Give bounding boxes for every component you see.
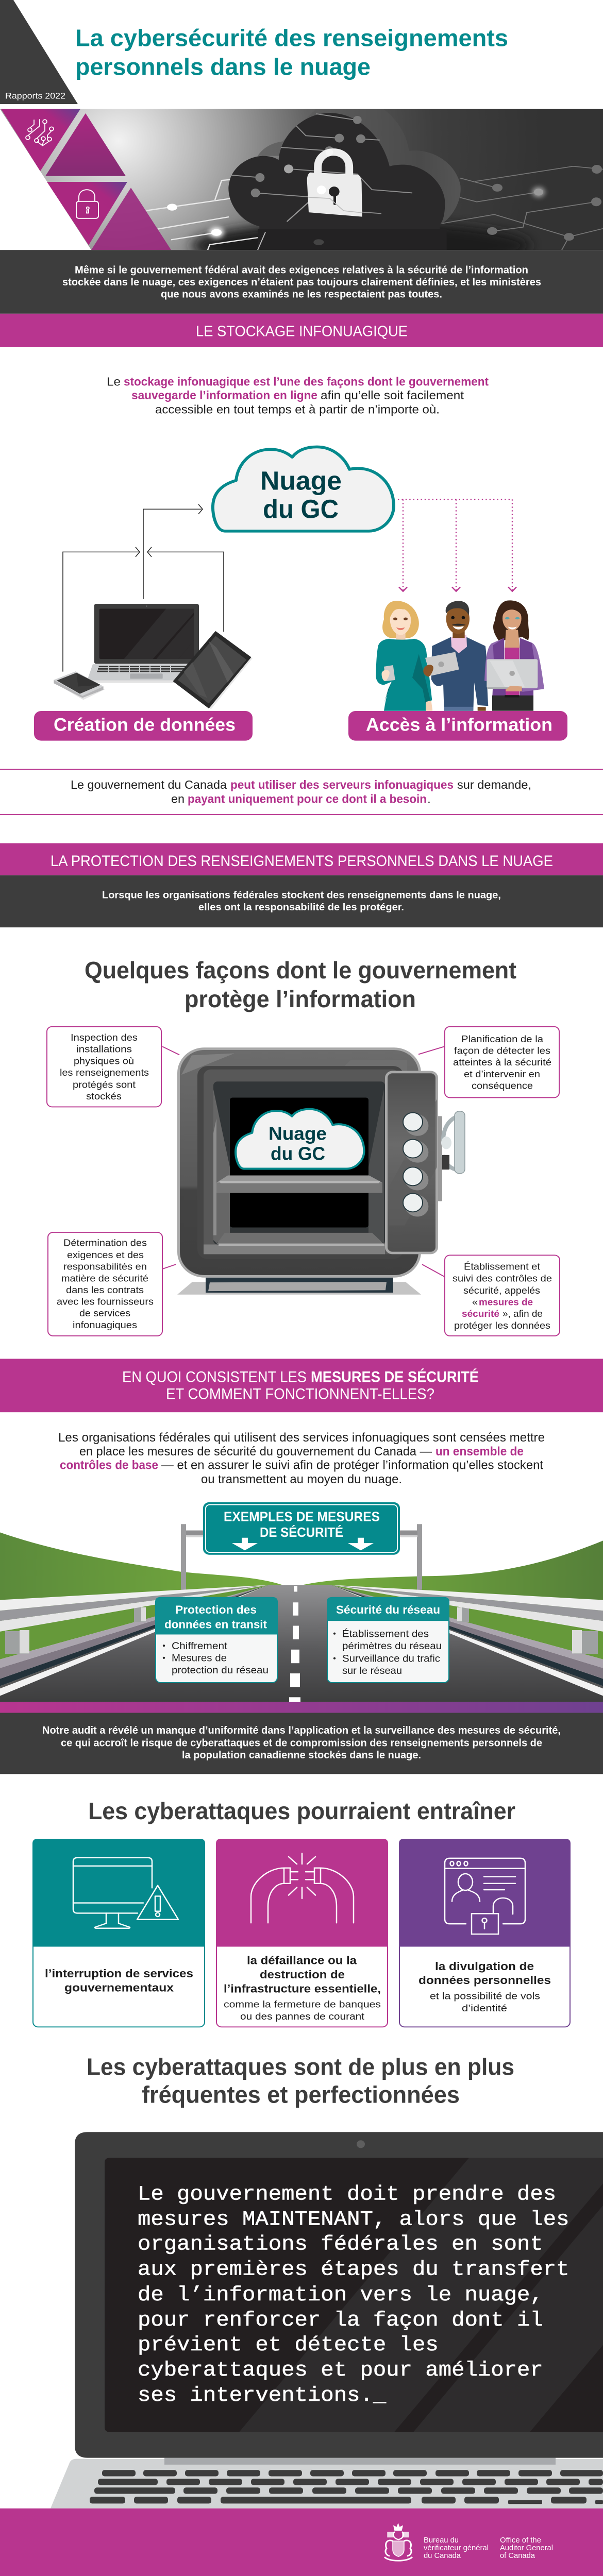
- cloud storage definition: sauvegarde l’information en ligne: [131, 389, 317, 402]
- hero image: padlocked cloud on circuit board: [0, 109, 603, 250]
- intro band: [0, 250, 603, 314]
- GC cloud: [213, 447, 394, 531]
- callout: breach response planning: Planification de la: [461, 1033, 543, 1045]
- card: personal data disclosure: [399, 1839, 571, 2027]
- illustration: three people with devices: [376, 600, 544, 711]
- intro band: Même si le gouvernement fédéral avait des exigences relatives à la sécurité de l’information: [75, 264, 528, 276]
- panel: data in transit protection: Chiffrement: [172, 1640, 227, 1652]
- callout: contract requirements: de services: [79, 1308, 130, 1319]
- call to action on laptop screen: aux premières étapes du transfert: [138, 2259, 569, 2281]
- highway sign: examples of security measures: EXEMPLES DE MESURES: [224, 1509, 380, 1524]
- report label: Rapports 2022: [5, 91, 65, 101]
- footer: Bureau du: [424, 2536, 459, 2545]
- keyboard: [90, 2470, 603, 2504]
- callout: security controls: suivi des contrôles de: [453, 1273, 552, 1284]
- callout: security controls: mesures de: [479, 1297, 533, 1308]
- callout: contract requirements: exigences et des: [67, 1249, 144, 1261]
- panel: data in transit protection: protection du réseau: [172, 1665, 269, 1676]
- audit finding band: Notre audit a révélé un manque d’uniformité dans l’application et la surveillance des mesures de sécurité,: [42, 1724, 561, 1736]
- icon: laptop, tablet and phone: [54, 604, 253, 709]
- label: access to information: [348, 711, 567, 741]
- icon: user profile with lock: [445, 1858, 525, 1934]
- callout: breach response planning: atteintes à la sécurité: [453, 1057, 551, 1068]
- callout: site inspection: Inspection des: [71, 1032, 138, 1043]
- decorative triangle: [45, 113, 126, 176]
- section band: what are security measures: ET COMMENT FONCTIONNENT-ELLES?: [166, 1386, 434, 1402]
- GC cloud: du GC: [263, 495, 339, 524]
- label: access to information: Accès à l’information: [366, 715, 552, 735]
- decorative triangle with lock icon: [47, 182, 127, 245]
- woman with phone: [376, 601, 432, 711]
- callout: contract requirements: infonuagiques: [73, 1319, 137, 1331]
- callout: on-demand cloud servers: en: [171, 792, 185, 806]
- icon: unplugged cables: [251, 1853, 354, 1923]
- panel: network security: Surveillance du trafic: [342, 1653, 440, 1664]
- card: infrastructure failure: [216, 1839, 388, 2027]
- audit finding band: ce qui accroît le risque de cyberattaques et de compromission des renseignements personnels de: [61, 1737, 542, 1749]
- cloud storage definition: stockage infonuagique est l’une des façons dont le gouvernement: [124, 375, 489, 388]
- text: security controls explanation: [58, 1431, 545, 1486]
- card: service interruption: gouvernementaux: [64, 1981, 174, 1994]
- callout: on-demand cloud servers: [0, 769, 603, 815]
- footer: vérificateur général: [424, 2544, 489, 2552]
- illustration: large laptop: [51, 2132, 603, 2509]
- panel: network security: sur le réseau: [342, 1666, 402, 1676]
- small GC cloud: [236, 1109, 364, 1169]
- logo: coat of arms: [384, 2524, 412, 2561]
- callout: contract requirements: matière de sécurité: [61, 1273, 148, 1284]
- section band: what are security measures: MESURES DE SÉCURITÉ: [311, 1368, 479, 1385]
- man with tablet: [423, 601, 488, 711]
- connector lines from callouts to safe: [162, 1046, 444, 1277]
- call to action on laptop screen: organisations fédérales en sont: [138, 2233, 543, 2256]
- card: infrastructure failure: la défaillance ou la: [247, 1954, 357, 1967]
- safe door with knobs and handle: [387, 1072, 465, 1253]
- panel: network security: périmètres du réseau: [342, 1640, 442, 1652]
- responsibility band: elles ont la responsabilité de les protéger.: [198, 902, 404, 913]
- label: data creation: Création de données: [54, 715, 236, 735]
- responsibility band: [0, 875, 603, 927]
- panel: network security: Établissement des: [342, 1628, 429, 1639]
- heading: attacks more frequent and sophisticated: fréquentes et perfectionnées: [142, 2082, 460, 2108]
- call to action on laptop screen: Le gouvernement doit prendre des: [138, 2183, 556, 2206]
- audit finding band: la population canadienne stockés dans le nuage.: [182, 1749, 421, 1761]
- heading: ways the government protects information: [85, 957, 516, 1013]
- callout: contract requirements: avec les fournisseurs: [57, 1296, 154, 1307]
- GC cloud: Nuage: [260, 466, 342, 496]
- cloud storage definition: accessible en tout temps et à partir de n’importe où.: [155, 403, 440, 416]
- card: personal data disclosure: d’identité: [462, 2003, 507, 2014]
- callout: breach response planning: [445, 1027, 559, 1097]
- callout: contract requirements: Détermination des: [63, 1238, 147, 1248]
- text: security controls explanation: ou transmettent au moyen du nuage.: [201, 1473, 402, 1486]
- call to action on laptop screen: [138, 2183, 569, 2408]
- cloud storage definition: Le: [107, 375, 121, 388]
- woman with laptop: [484, 600, 544, 711]
- card: service interruption: l’interruption de services: [45, 1967, 193, 1980]
- heading: ways the government protects information: protège l’information: [185, 986, 416, 1013]
- call to action on laptop screen: ses interventions._: [138, 2384, 387, 2408]
- card: infrastructure failure: destruction de: [260, 1968, 345, 1981]
- section band: protecting personal information: LA PROTECTION DES RENSEIGNEMENTS PERSONNELS DANS LE NUAGE: [51, 853, 553, 870]
- illustration: highway: [0, 1524, 603, 1702]
- illustration: safe holding the GC cloud: Nuage: [269, 1124, 327, 1144]
- section band: cloud storage: LE STOCKAGE INFONUAGIQUE: [196, 324, 408, 340]
- header corner triangle: [0, 0, 78, 104]
- footer: Office of the: [500, 2536, 541, 2545]
- footer: du Canada: [424, 2551, 461, 2560]
- callout: site inspection: physiques où: [74, 1056, 134, 1066]
- cloud storage definition: [107, 375, 489, 416]
- responsibility band: Lorsque les organisations fédérales stockent des renseignements dans le nuage,: [102, 890, 501, 901]
- footer: of Canada: [500, 2551, 535, 2560]
- illustration: safe holding the GC cloud: [177, 1049, 465, 1295]
- footer: [0, 2509, 603, 2576]
- text: security controls explanation: en place les mesures de sécurité du gouvernement du Canada —: [79, 1445, 432, 1459]
- panel: data in transit protection: données en transit: [164, 1618, 267, 1631]
- label: data creation: [34, 711, 253, 741]
- callout: security controls: [445, 1255, 560, 1336]
- title: [75, 25, 508, 80]
- card: personal data disclosure: la divulgation de: [435, 1959, 534, 1973]
- decorative triangle with circuit icon: [1, 109, 80, 171]
- padlock: [307, 149, 362, 217]
- title: La cybersécurité des renseignements: [75, 25, 508, 52]
- card: infrastructure failure: l’infrastructure essentielle,: [224, 1982, 381, 1995]
- callout: contract requirements: dans les contrats: [66, 1284, 144, 1296]
- callout: site inspection: les renseignements: [60, 1067, 149, 1078]
- card: personal data disclosure: et la possibilité de vols: [430, 1991, 540, 2002]
- callout: site inspection: [47, 1027, 161, 1107]
- intro band: stockée dans le nuage, ces exigences n’étaient pas toujours clairement définies, et les ministères: [62, 276, 541, 288]
- callout: breach response planning: et d’intervenir en: [464, 1069, 540, 1080]
- heading: cyberattacks could cause: Les cyberattaques pourraient entraîner: [88, 1798, 515, 1825]
- callout: on-demand cloud servers: peut utiliser des serveurs infonuagiques: [230, 778, 454, 792]
- callout: security controls: Établissement et: [464, 1261, 541, 1272]
- panel: data in transit protection: Protection des: [175, 1603, 257, 1616]
- callout: site inspection: installations: [76, 1044, 132, 1055]
- arrows: devices to cloud: [63, 504, 224, 672]
- call to action on laptop screen: de l’information vers le nuage,: [138, 2284, 543, 2307]
- panel: data in transit protection: [155, 1597, 278, 1683]
- callout: on-demand cloud servers: .: [427, 792, 431, 806]
- callout: breach response planning: conséquence: [472, 1080, 533, 1091]
- icon: monitor with warning: [73, 1858, 178, 1928]
- section band: protecting personal information: [0, 843, 603, 875]
- illustration: safe holding the GC cloud: du GC: [271, 1143, 325, 1164]
- text: security controls explanation: — et en assurer le suivi afin de protéger l’information qu’elles stockent: [161, 1459, 543, 1472]
- heading: ways the government protects information: Quelques façons dont le gouvernement: [85, 957, 516, 984]
- callout: site inspection: protégés sont: [73, 1079, 136, 1090]
- panel: data in transit protection: Mesures de: [172, 1653, 227, 1664]
- call to action on laptop screen: pour renforcer la façon dont il: [138, 2309, 543, 2332]
- callout: site inspection: stockés: [86, 1091, 122, 1102]
- card: infrastructure failure: ou des pannes de courant: [240, 2011, 365, 2022]
- intro band: que nous avons examinés ne les respectaient pas toutes.: [161, 288, 442, 300]
- callout: security controls: protéger les données: [454, 1320, 550, 1331]
- section band: cloud storage: [0, 314, 603, 347]
- text: security controls explanation: contrôles de base: [60, 1459, 158, 1472]
- audit finding band: [0, 1702, 603, 1774]
- panel: network security: Sécurité du réseau: [336, 1603, 440, 1616]
- section band: what are security measures: EN QUOI CONSISTENT LES: [122, 1369, 307, 1385]
- dotted arrows: cloud to users: [398, 499, 516, 591]
- call to action on laptop screen: prévient et détecte les: [138, 2334, 439, 2357]
- heading: attacks more frequent and sophisticated: Les cyberattaques sont de plus en plus: [87, 2054, 514, 2080]
- callout: security controls: sécurité: [462, 1309, 499, 1319]
- callout: on-demand cloud servers: payant uniquement pour ce dont il a besoin: [188, 792, 427, 806]
- road centre line: [289, 1586, 300, 1702]
- card: service interruption: [32, 1839, 205, 2027]
- card: infrastructure failure: comme la fermeture de banques: [224, 1999, 381, 2010]
- callout: security controls: sécurité, appelés: [463, 1285, 540, 1296]
- sign arrows: [232, 1538, 374, 1550]
- heading: attacks more frequent and sophisticated: [87, 2054, 514, 2108]
- callout: contract requirements: responsabilités en: [63, 1261, 147, 1272]
- section band: what are security measures: [0, 1359, 603, 1412]
- left guardrail and barrier: [0, 1585, 269, 1696]
- card: personal data disclosure: données personnelles: [418, 1974, 551, 1987]
- call to action on laptop screen: mesures MAINTENANT, alors que les: [138, 2208, 569, 2231]
- title: personnels dans le nuage: [75, 54, 371, 80]
- footer: Auditor General: [500, 2544, 553, 2552]
- callout: security controls: », afin de: [502, 1309, 543, 1319]
- text: security controls explanation: Les organisations fédérales qui utilisent des services infonuagiques sont censées mettre: [58, 1431, 545, 1445]
- highway sign: examples of security measures: [203, 1502, 400, 1555]
- call to action on laptop screen: cyberattaques et pour améliorer: [138, 2359, 543, 2382]
- callout: on-demand cloud servers: Le gouvernement du Canada: [71, 778, 227, 792]
- cloud storage definition: afin qu’elle soit facilement: [321, 389, 464, 402]
- decorative translucent triangle: [91, 188, 171, 250]
- highway sign: examples of security measures: DE SÉCURITÉ: [260, 1525, 343, 1540]
- callout: on-demand cloud servers: sur demande,: [457, 778, 531, 792]
- callout: contract requirements: [48, 1232, 162, 1336]
- right guardrail and barrier: [331, 1585, 603, 1696]
- panel: network security: [327, 1597, 449, 1683]
- callout: breach response planning: façon de détecter les: [454, 1045, 550, 1056]
- text: security controls explanation: un ensemble de: [435, 1445, 524, 1459]
- callout: security controls: «: [472, 1297, 478, 1308]
